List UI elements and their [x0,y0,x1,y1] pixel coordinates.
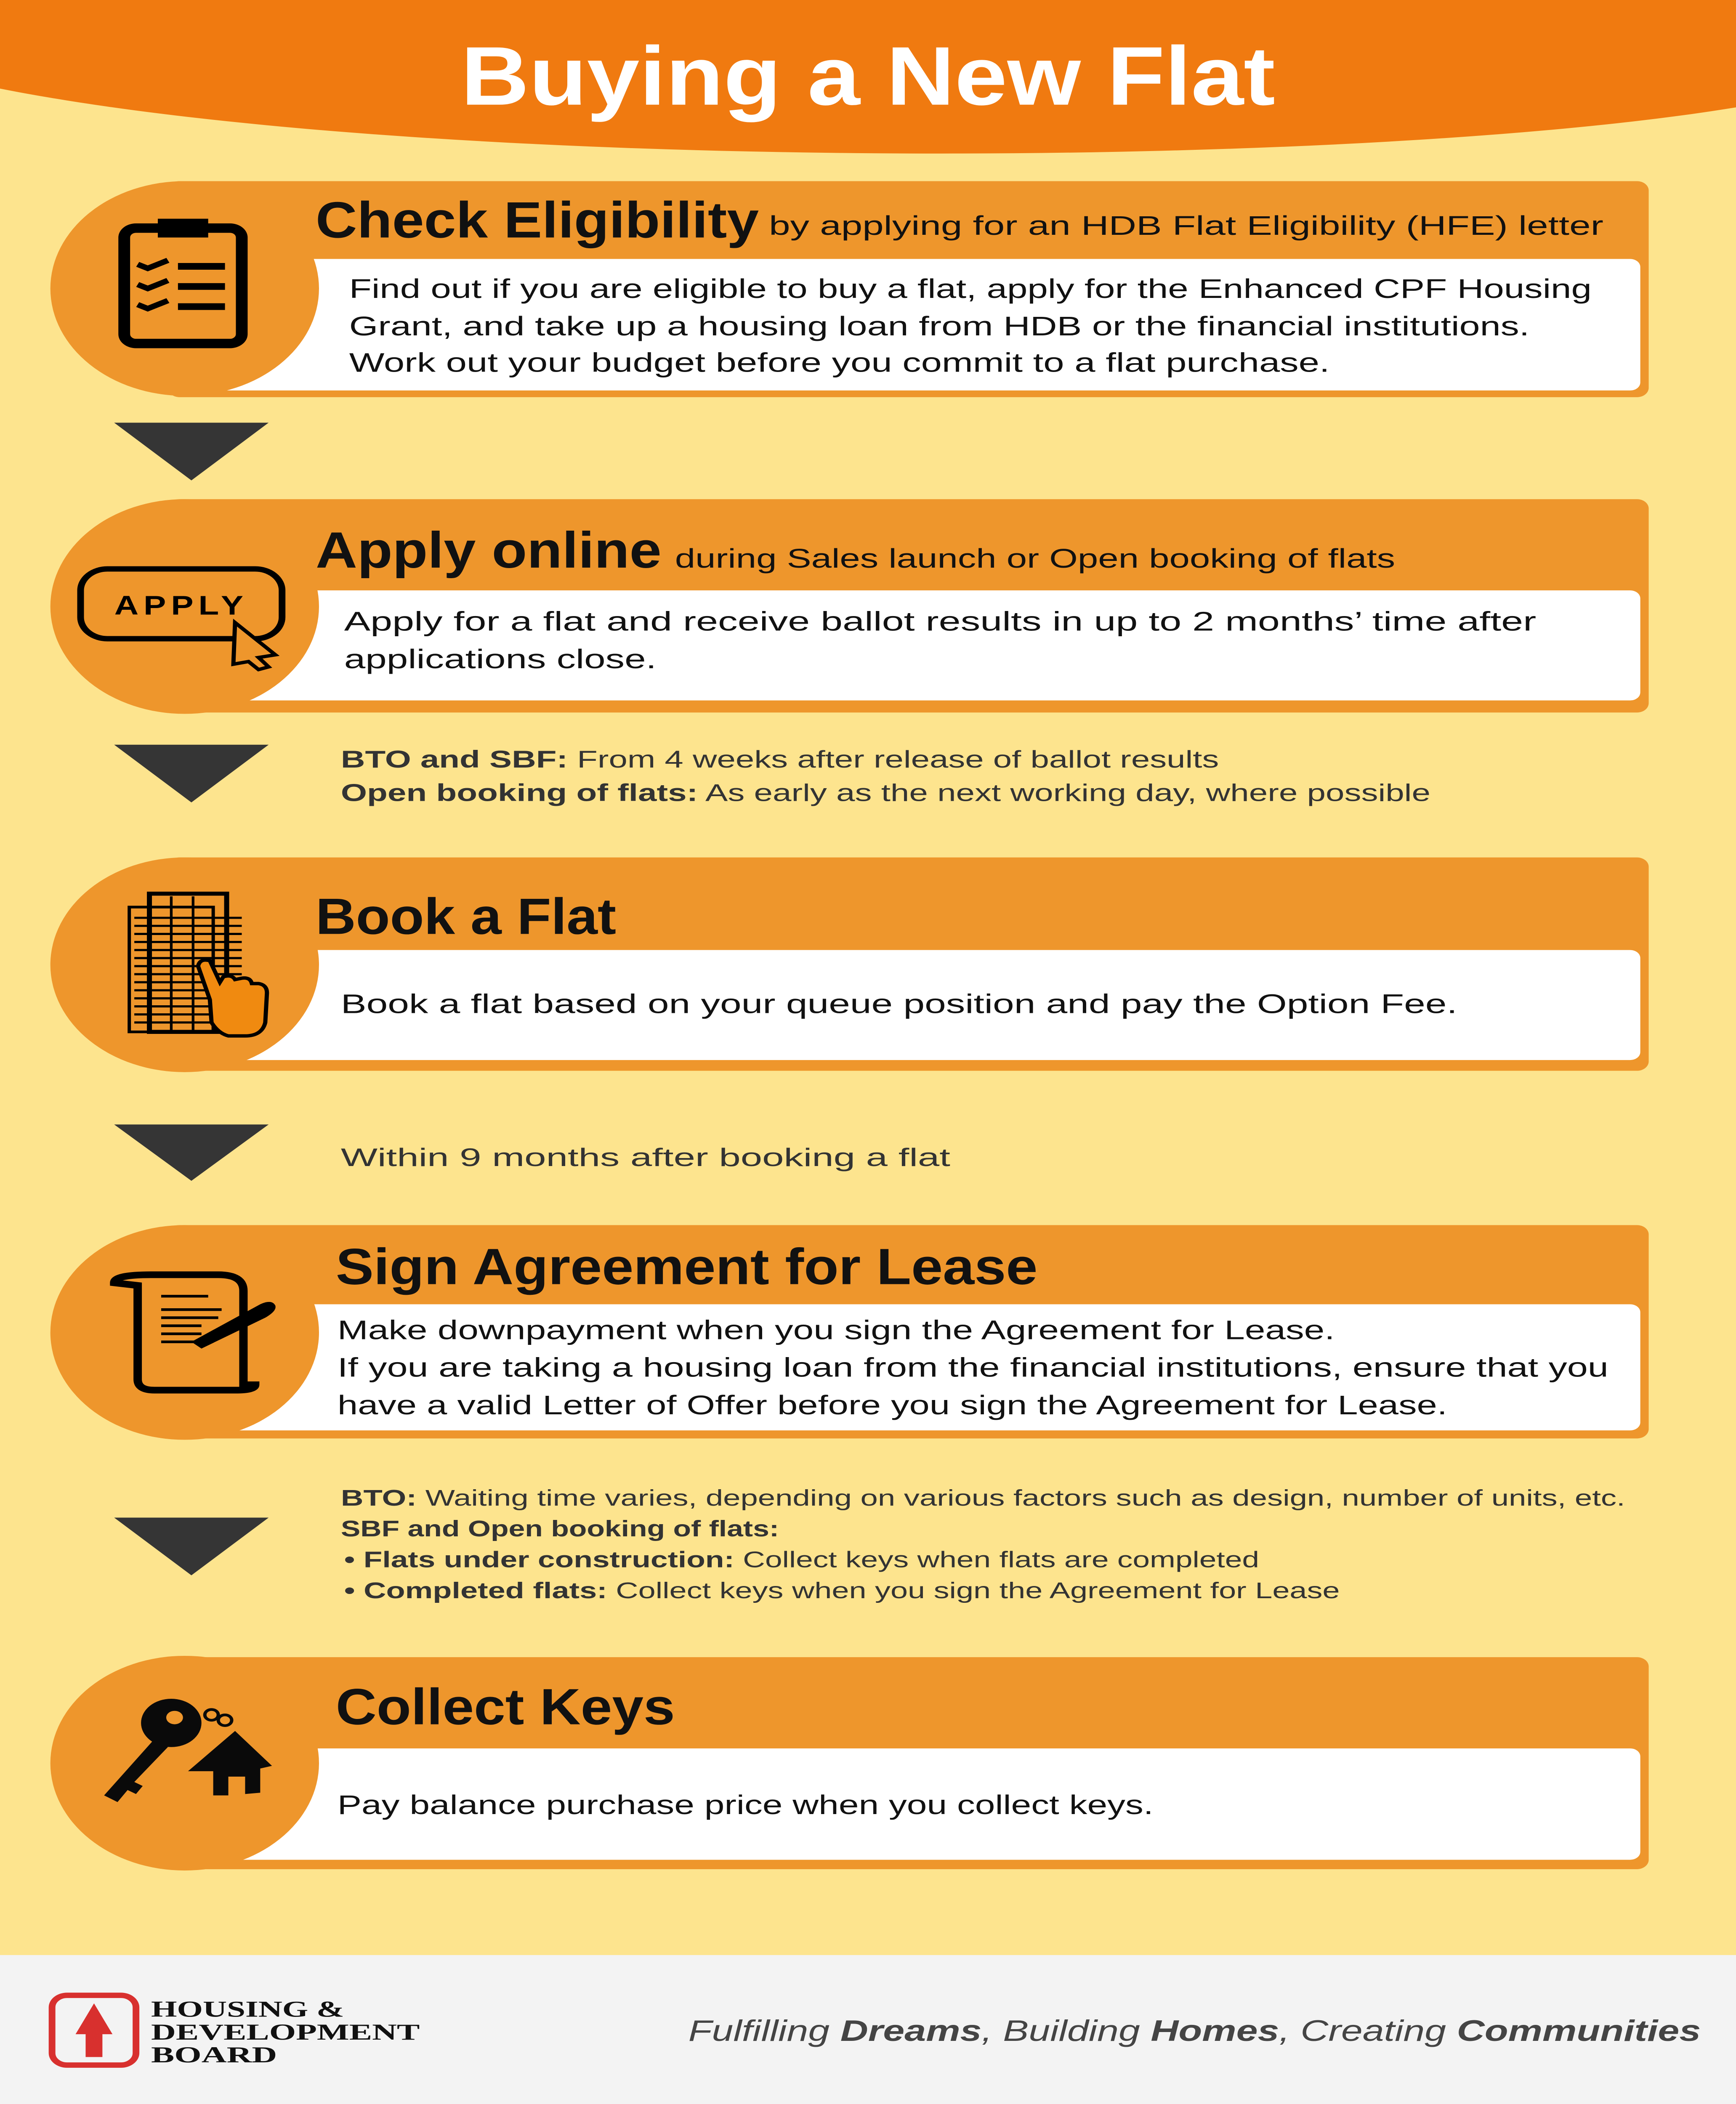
arrow 3 with note: Within 9 months after booking a flat [341,1143,950,1172]
text block: Grant, and take up a housing loan from HDB or the financial institutions. [349,312,1529,341]
arrow 4 with note: SBF and Open booking of flats: [341,1516,779,1542]
heading: Book a Flat [316,888,616,945]
icon: keys and house [104,1699,272,1802]
icon: apply button: APPLY [114,591,248,621]
arrow 4 with note [114,1485,1625,1603]
subheading: by applying for an HDB Flat Eligibility (HFE) letter [769,211,1603,241]
icon: apply button [80,569,282,669]
text block [349,274,1592,377]
arrow 1 [114,422,269,481]
text block: Apply for a flat and receive ballot results in up to 2 months’ time after [344,607,1536,637]
heading: Sign Agreement for Lease [336,1238,1037,1295]
arrow 2 with note: BTO and SBF: From 4 weeks after release of ballot results [341,746,1219,773]
heading: Collect Keys [336,1679,675,1735]
icon: building with hand [129,894,267,1036]
text block: Book a flat based on your queue position and pay the Option Fee. [341,989,1457,1019]
title: Buying a New Flat [461,29,1275,122]
icon: scroll and pen [114,1275,276,1390]
text block: Pay balance purchase price when you collect keys. [338,1791,1154,1820]
arrow 4 with note: • Completed flats: Collect keys when you sign the Agreement for Lease [344,1578,1340,1603]
panel: sign agreement [51,1225,1649,1440]
text block [344,607,1536,674]
heading: Check Eligibility [316,192,759,249]
icon: clipboard [124,219,242,343]
text block: Work out your budget before you commit to a flat purchase. [349,348,1330,377]
panel: check eligibility [51,181,1649,397]
arrow 4 with note: • Flats under construction: Collect keys when flats are completed [344,1547,1259,1573]
panel: book a flat [51,858,1649,1072]
subheading: during Sales launch or Open booking of flats [675,544,1395,574]
heading: Apply online [316,522,662,579]
text block: Make downpayment when you sign the Agreement for Lease. [338,1315,1335,1345]
logo [52,1995,420,2068]
header banner [0,0,1736,154]
panel: collect keys [51,1656,1649,1870]
text block: applications close. [344,644,657,674]
text block [338,1315,1608,1420]
footer [0,1955,1736,2104]
text block: If you are taking a housing loan from the financial institutions, ensure that you [338,1353,1608,1383]
text block: Find out if you are eligible to buy a flat, apply for the Enhanced CPF Housing [349,274,1592,304]
arrow 4 with note: BTO: Waiting time varies, depending on various factors such as design, number of units, etc. [341,1485,1625,1511]
logo: DEVELOPMENT [151,2019,420,2045]
text block: have a valid Letter of Offer before you sign the Agreement for Lease. [338,1390,1447,1420]
arrow 3 with note [114,1124,950,1181]
logo: BOARD [151,2042,277,2068]
logo: HOUSING & [151,1997,344,2022]
panel: apply online [51,499,1649,714]
tagline: Fulfilling Dreams , Building Homes , Creating Communities [689,2014,1701,2047]
arrow 2 with note: Open booking of flats: As early as the next working day, where possible [341,779,1430,806]
arrow 2 with note [114,745,1430,806]
